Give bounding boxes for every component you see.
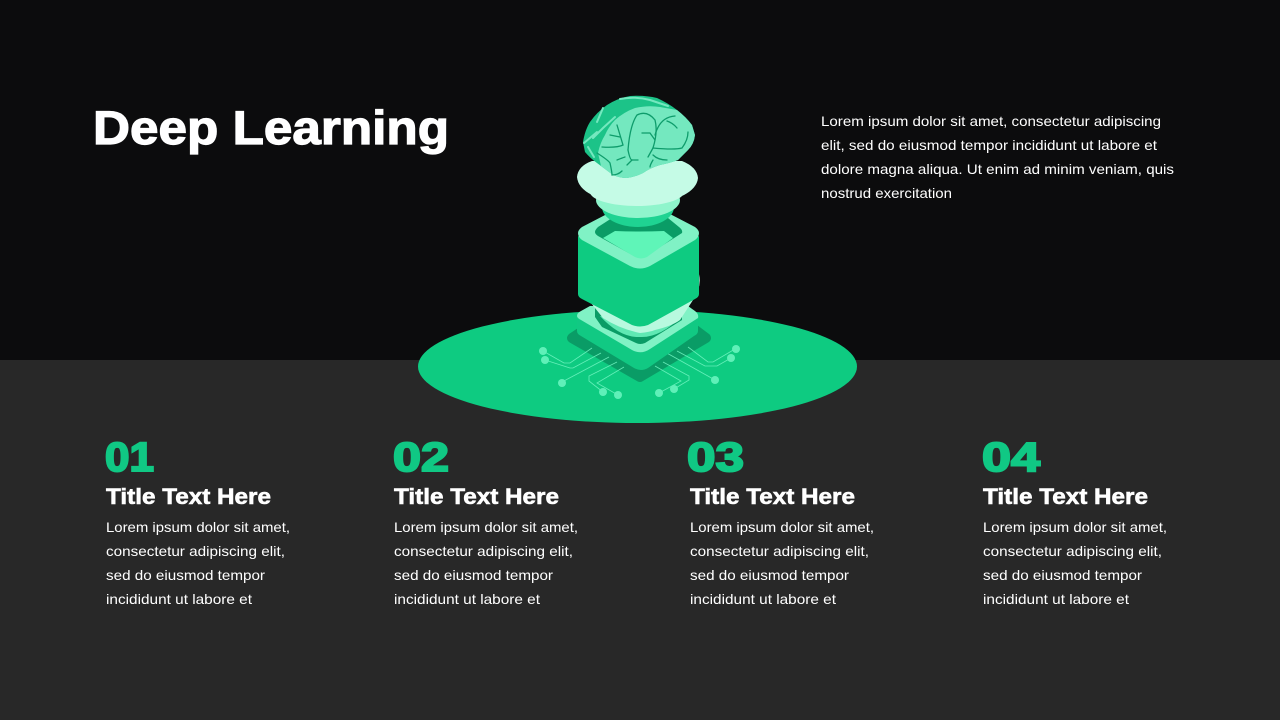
cube inner face	[603, 231, 673, 258]
column 1 text	[106, 519, 290, 607]
number 04: 04	[982, 434, 1040, 480]
lower chip rim	[577, 306, 698, 352]
column 4 text: sed do eiusmod tempor	[983, 567, 1142, 583]
column 2 text: sed do eiusmod tempor	[394, 567, 553, 583]
column 4 text: Lorem ipsum dolor sit amet,	[983, 519, 1167, 535]
bowl stem dark layer	[602, 187, 674, 227]
brain	[583, 96, 695, 178]
column 3 text: Lorem ipsum dolor sit amet,	[690, 519, 874, 535]
cube top rim	[578, 201, 699, 268]
intro text block: dolore magna aliqua. Ut enim ad minim veniam, quis	[821, 161, 1174, 177]
brain shell	[583, 96, 695, 178]
column 4 text: incididunt ut labore et	[983, 591, 1129, 607]
intro text block: nostrud exercitation	[821, 185, 952, 201]
intro text block: elit, sed do eiusmod tempor incididunt ut labore et	[821, 137, 1157, 153]
number 01: 01	[105, 434, 154, 480]
column 4 text	[983, 519, 1167, 607]
column 2 text: Lorem ipsum dolor sit amet,	[394, 519, 578, 535]
column 2 text: incididunt ut labore et	[394, 591, 540, 607]
cube recess	[595, 218, 682, 258]
column 4 text: consectetur adipiscing elit,	[983, 543, 1162, 559]
lower chip block	[577, 318, 698, 370]
brain folds	[597, 113, 688, 175]
central illustration: brain on chip pedestal	[418, 96, 857, 423]
column 1 text: consectetur adipiscing elit,	[106, 543, 285, 559]
intro text block: Lorem ipsum dolor sit amet, consectetur adipiscing	[821, 113, 1161, 129]
column 2 text	[394, 519, 578, 607]
column 1 text: Lorem ipsum dolor sit amet,	[106, 519, 290, 535]
bowl rim	[577, 161, 698, 204]
column 2 heading: Title Text Here	[394, 484, 559, 509]
title: Deep Learning	[93, 101, 449, 154]
chip shadow	[572, 326, 706, 377]
brain light lobes	[598, 106, 695, 178]
circuit nodes	[539, 345, 740, 399]
column 3 heading: Title Text Here	[690, 484, 855, 509]
bowl lower cream layer	[590, 178, 684, 206]
circuit traces	[543, 347, 735, 395]
intro text block	[821, 113, 1174, 201]
column 1 text: sed do eiusmod tempor	[106, 567, 265, 583]
column 1 heading: Title Text Here	[106, 484, 271, 509]
column 3	[687, 434, 874, 607]
green platform ellipse	[418, 310, 857, 423]
column 4 heading: Title Text Here	[983, 484, 1148, 509]
lower chip recess	[595, 306, 682, 344]
number 03: 03	[687, 434, 744, 480]
brain highlight stripes	[584, 98, 668, 157]
column 4	[982, 434, 1167, 607]
number 02: 02	[393, 434, 449, 480]
bowl stem mid layer	[596, 182, 680, 218]
column 2	[393, 434, 578, 607]
lower bowl mint band	[600, 316, 682, 337]
column 3 text: incididunt ut labore et	[690, 591, 836, 607]
cube body	[578, 236, 699, 326]
lower bowl under cube	[587, 268, 700, 333]
column 3 text: consectetur adipiscing elit,	[690, 543, 869, 559]
column 1	[105, 434, 290, 607]
column 3 text	[690, 519, 874, 607]
column 3 text: sed do eiusmod tempor	[690, 567, 849, 583]
column 2 text: consectetur adipiscing elit,	[394, 543, 573, 559]
column 1 text: incididunt ut labore et	[106, 591, 252, 607]
